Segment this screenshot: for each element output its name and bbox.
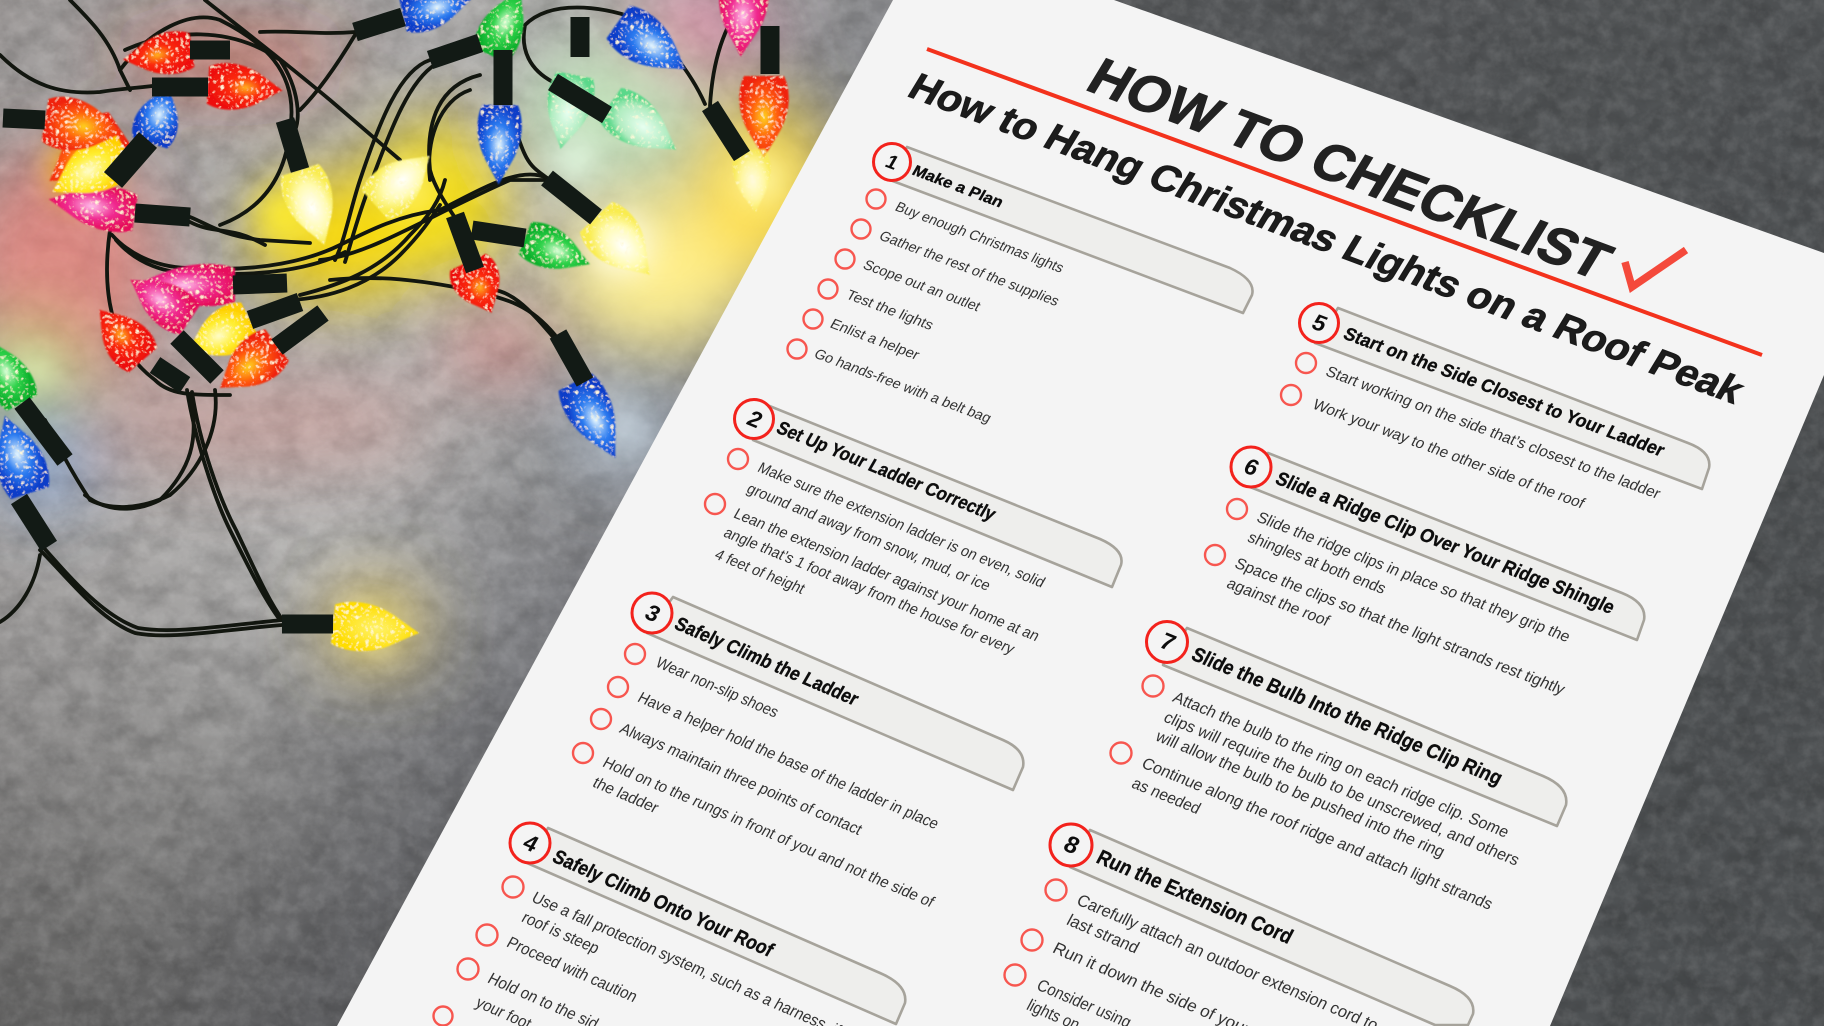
section 5: Start on the Side Closest to Your Ladder: 5 (1308, 309, 1332, 337)
section 1: Make a Plan: Enlist a helper (827, 317, 922, 363)
section 7: Slide the Bulb Into the Ridge Clip Ring: Attach the bulb to the ring on each ridge clip. Some (1170, 689, 1512, 841)
section 2: Set Up Your Ladder Correctly (705, 400, 1122, 658)
section 6: Slide a Ridge Clip Over Your Ridge Shingle: shingles at both ends (1245, 530, 1389, 598)
section 3: Safely Climb the Ladder: Hold on to the rungs in front of you and not the side of (600, 755, 937, 911)
section 1: Make a Plan: Make a Plan (909, 163, 1006, 211)
section 3: Safely Climb the Ladder: Always maintain three points of contact (617, 721, 865, 839)
section 4: Safely Climb Onto Your Roof: Safely Climb Onto Your Roof (548, 846, 778, 961)
subtitle: How to Hang Christmas Lights on a Roof Peak (901, 66, 1752, 412)
section 1: Make a Plan: Buy enough Christmas lights (892, 200, 1067, 276)
section 2: Set Up Your Ladder Correctly: 4 feet of height (711, 547, 808, 598)
section 1: Make a Plan: 1 (881, 151, 903, 174)
section 4: Safely Climb Onto Your Roof: Proceed with caution (503, 934, 641, 1006)
section 6: Slide a Ridge Clip Over Your Ridge Shingle (1205, 447, 1644, 698)
section 8: Run the Extension Cord: last strand (1064, 911, 1142, 957)
icon: red check mark (1625, 250, 1686, 287)
section 3: Safely Climb the Ladder: Safely Climb the Ladder (671, 613, 863, 710)
section 6: Slide a Ridge Clip Over Your Ridge Shingle: Slide the ridge clips in place so that they grip the (1254, 510, 1573, 646)
section 5: Start on the Side Closest to Your Ladder: Work your way to the other side of the roof (1310, 397, 1588, 512)
section 6: Slide a Ridge Clip Over Your Ridge Shingle: Slide a Ridge Clip Over Your Ridge Shingle (1272, 468, 1619, 619)
section 6: Slide a Ridge Clip Over Your Ridge Shingle: Space the clips so that the light strands rest tightly (1232, 556, 1568, 698)
section 7: Slide the Bulb Into the Ridge Clip Ring: Slide the Bulb Into the Ridge Clip Ring (1188, 643, 1506, 790)
section 8: Run the Extension Cord: 8 (1059, 831, 1084, 860)
section 7: Slide the Bulb Into the Ridge Clip Ring: will allow the bulb to be pushed into the ring (1152, 727, 1448, 861)
section 3: Safely Climb the Ladder (573, 593, 1023, 911)
section 7: Slide the Bulb Into the Ridge Clip Ring (1110, 622, 1566, 913)
section 6: Slide a Ridge Clip Over Your Ridge Shingle: against the roof (1224, 576, 1333, 630)
Christmas light strand (0, 0, 789, 657)
section 3: Safely Climb the Ladder: 3 (641, 599, 665, 627)
bulbs (0, 0, 789, 657)
section 1: Make a Plan (788, 144, 1253, 426)
bulb sockets (3, 17, 770, 624)
cords (0, 0, 745, 635)
section 2: Set Up Your Ladder Correctly: ground and away from snow, mud, or ice (743, 481, 993, 594)
section 1: Make a Plan: Gather the rest of the supplies (876, 229, 1062, 310)
bulb glow halos (19, 140, 782, 648)
section 7: Slide the Bulb Into the Ridge Clip Ring: Continue along the roof ridge and attach light strands (1139, 755, 1496, 913)
section 5: Start on the Side Closest to Your Ladder: Start on the Side Closest to Your Ladder (1340, 323, 1669, 460)
section 2: Set Up Your Ladder Correctly: Lean the extension ladder against your home at an (730, 506, 1042, 645)
section 7: Slide the Bulb Into the Ridge Clip Ring: clips will require the bulb to be unscrewed, and others (1161, 709, 1522, 869)
title: HOW TO CHECKLIST (1077, 48, 1622, 291)
section 4: Safely Climb Onto Your Roof: 4 (519, 829, 544, 857)
section 2: Set Up Your Ladder Correctly: Set Up Your Ladder Correctly (772, 418, 1000, 525)
light glow on concrete (0, 0, 830, 665)
section 1: Make a Plan: Test the lights (843, 288, 936, 334)
section 8: Run the Extension Cord (1004, 824, 1473, 1026)
section 5: Start on the Side Closest to Your Ladder: Start working on the side that’s closest to the ladder (1323, 364, 1663, 502)
section 2: Set Up Your Ladder Correctly: Make sure the extension ladder is on even, solid (754, 460, 1048, 591)
section 7: Slide the Bulb Into the Ridge Clip Ring: as needed (1129, 775, 1204, 818)
section 2: Set Up Your Ladder Correctly: 2 (743, 405, 767, 433)
section 3: Safely Climb the Ladder: Wear non-slip shoes (653, 655, 781, 721)
section 4: Safely Climb Onto Your Roof: roof is steep (518, 909, 603, 958)
section 7: Slide the Bulb Into the Ridge Clip Ring: 7 (1155, 628, 1180, 657)
section 2: Set Up Your Ladder Correctly: angle that’s 1 foot away from the house for every (720, 525, 1018, 658)
section 8: Run the Extension Cord: Run the Extension Cord (1093, 846, 1297, 949)
section 4: Safely Climb Onto Your Roof (434, 823, 905, 1026)
section 5: Start on the Side Closest to Your Ladder (1281, 304, 1709, 512)
section 1: Make a Plan: Go hands-free with a belt bag (811, 347, 994, 426)
red title rule (927, 49, 1762, 355)
section 3: Safely Climb the Ladder: the ladder (590, 775, 662, 817)
section 6: Slide a Ridge Clip Over Your Ridge Shingle: 6 (1240, 453, 1264, 481)
section 3: Safely Climb the Ladder: Have a helper hold the base of the ladder in place (635, 690, 942, 833)
section 1: Make a Plan: Scope out an outlet (860, 258, 983, 315)
